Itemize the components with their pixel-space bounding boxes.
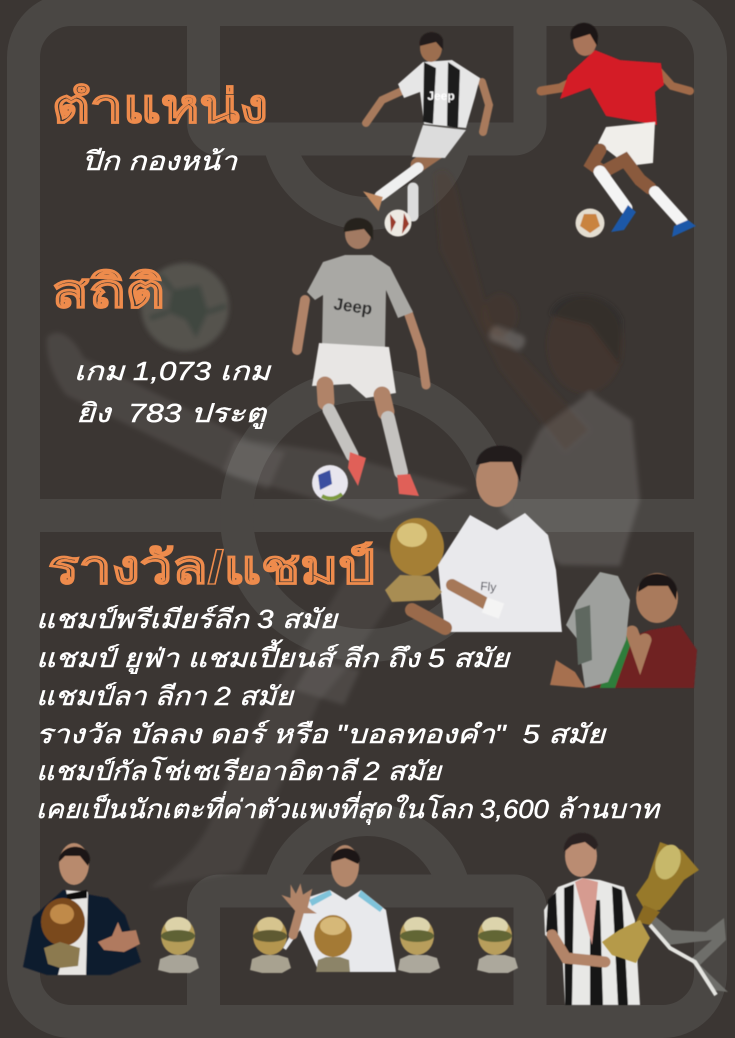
text: statistics games and goals: เกม 1,073 เกม bbox=[74, 356, 272, 386]
heading: awards and championships: รางวัล/แชมป์ bbox=[48, 541, 375, 593]
player: Juventus grey kit: Jeep bbox=[332, 294, 373, 319]
text: statistics games and goals bbox=[74, 356, 272, 429]
icon: golden ball trophy 4 bbox=[477, 917, 518, 973]
player: tuxedo holding golden ball bbox=[23, 843, 141, 975]
player: Real Madrid with golden ball: Fly bbox=[480, 579, 497, 594]
faded background ball bbox=[141, 263, 229, 351]
player: Juventus striped kit kicking: Jeep bbox=[427, 89, 455, 103]
player: Juventus striped kit kicking bbox=[366, 32, 489, 237]
player: Manchester United red kit running bbox=[541, 23, 696, 238]
player: Real Madrid with golden ball bbox=[385, 446, 562, 632]
list: honours bbox=[36, 604, 661, 825]
list: honours: รางวัล บัลลง ดอร์ หรือ "บอลทองคำ" 5 สมัย bbox=[36, 719, 607, 749]
icon: golden ball trophy 2 bbox=[250, 917, 291, 973]
list: honours: เคยเป็นนักเตะที่ค่าตัวแพงที่สุดในโลก 3,600 ล้านบาท bbox=[36, 791, 661, 825]
list: honours: แชมป์พรีเมียร์ลีก 3 สมัย bbox=[36, 604, 339, 634]
text: position detail: ปีก กองหน้า bbox=[82, 146, 239, 176]
text: statistics games and goals: ยิง 783 ประตู bbox=[76, 398, 267, 429]
player: Portugal with European trophy bbox=[550, 572, 697, 688]
player: Juventus grey kit bbox=[297, 218, 426, 501]
player: Juventus with Coppa Italia bbox=[544, 833, 640, 1005]
player: Real Madrid white kit with raised hand bbox=[283, 845, 396, 972]
heading: statistics: สถิติ bbox=[52, 265, 165, 317]
list: honours: แชมป์ลา ลีกา 2 สมัย bbox=[36, 681, 295, 711]
icon: golden ball trophy 3 bbox=[398, 917, 440, 973]
heading: position: ตำแหน่ง bbox=[52, 80, 268, 132]
list: honours: แชมป์ ยูฟ่า แชมเปี้ยนส์ ลีก ถึง 5 สมัย bbox=[36, 639, 511, 674]
icon: Coppa Italia trophy with scarf bbox=[602, 841, 728, 995]
list: honours: แชมป์กัลโช่เซเรียอาอิตาลี 2 สมัย bbox=[36, 756, 443, 786]
icon: golden ball trophy 1 bbox=[158, 917, 199, 973]
faded background player bbox=[47, 171, 640, 888]
